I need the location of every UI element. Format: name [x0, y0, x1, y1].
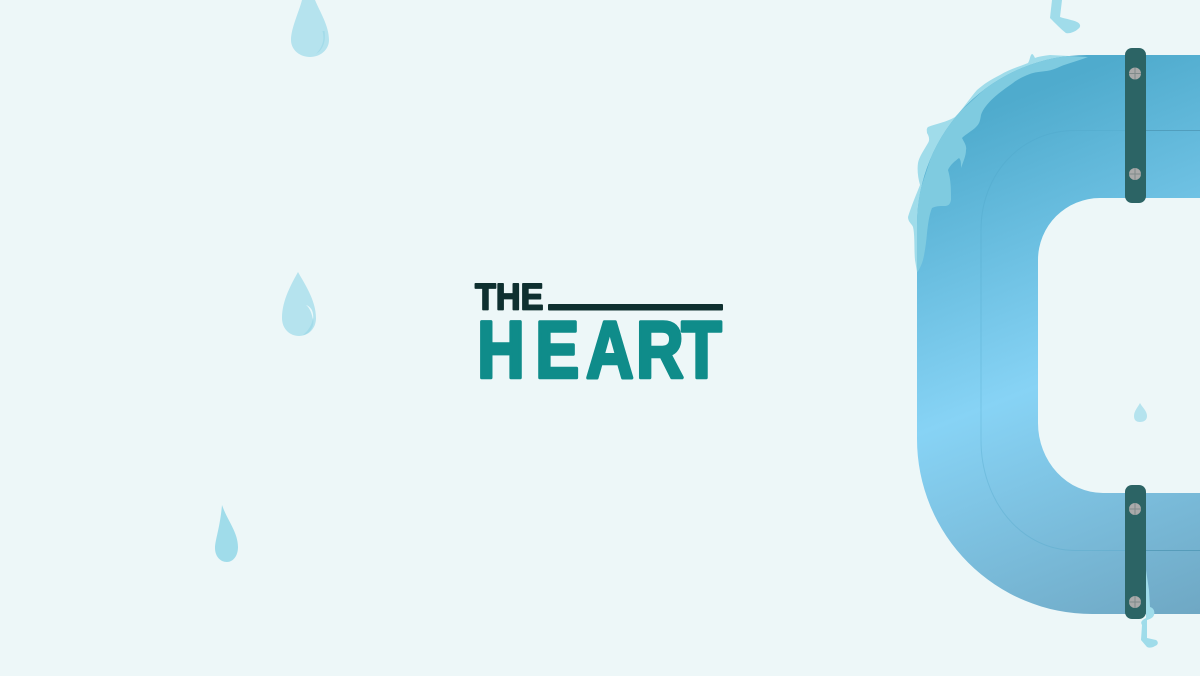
- pipe clamp bottom: [1125, 485, 1146, 619]
- icon: water drop lower: [215, 505, 238, 562]
- icon: water drop middle: [282, 272, 316, 336]
- icon: water drop top: [291, 0, 329, 57]
- title word: HEART: HEART: [477, 304, 722, 395]
- icon: small water drop: [1134, 403, 1147, 422]
- water overflow: inner layer: [905, 55, 1088, 272]
- screw: [1129, 596, 1141, 608]
- screw: [1129, 503, 1141, 515]
- title rule: [548, 304, 723, 310]
- icon: bottom drip: [1141, 570, 1158, 648]
- title word: THE: THE: [475, 276, 543, 318]
- pipe seam: left curve: [981, 130, 1125, 550]
- title logo: [475, 276, 723, 395]
- pipe clamp top: [1125, 48, 1146, 203]
- pipe body: [917, 55, 1200, 614]
- screw: [1129, 68, 1141, 80]
- pipe with water overflow: [905, 54, 1200, 614]
- pipe seam: right of clamps: [1146, 130, 1200, 550]
- icon: top drip: [1050, 0, 1080, 33]
- screw: [1129, 168, 1141, 180]
- water overflow: outer layer: [908, 54, 1088, 272]
